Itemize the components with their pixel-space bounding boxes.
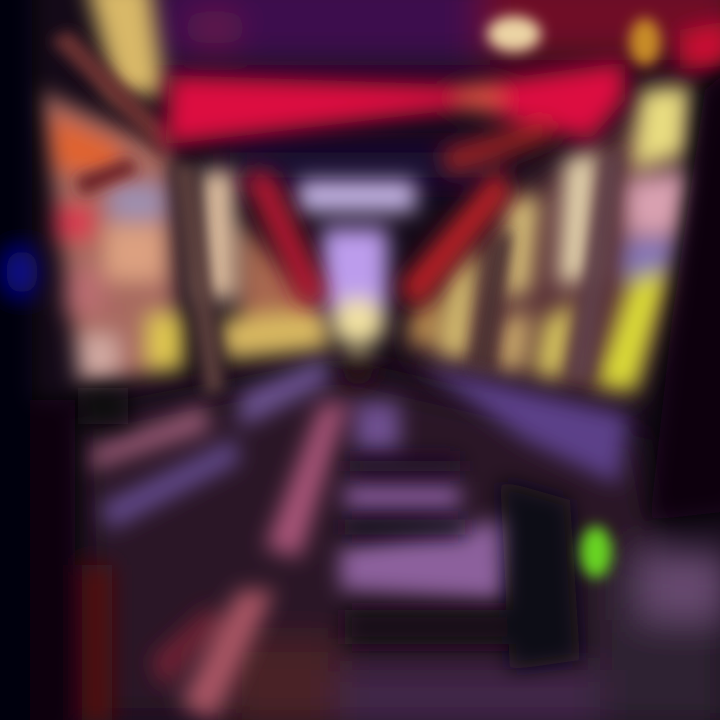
right beams bbox=[470, 150, 622, 380]
centre vanishing point glow bbox=[298, 180, 416, 386]
left beams bbox=[50, 30, 225, 395]
green glow bbox=[580, 526, 612, 578]
floor stripes bbox=[90, 358, 630, 720]
floor dark bands bbox=[78, 388, 580, 670]
right wall base bbox=[410, 90, 680, 400]
floor bbox=[80, 370, 720, 720]
right wall windows bbox=[410, 85, 690, 392]
left wall windows bbox=[40, 0, 330, 385]
red banner bbox=[165, 20, 720, 308]
left dark column bbox=[0, 0, 112, 720]
right dark column bbox=[650, 60, 720, 520]
ceiling bbox=[150, 0, 720, 180]
ceiling lights bbox=[487, 16, 661, 66]
